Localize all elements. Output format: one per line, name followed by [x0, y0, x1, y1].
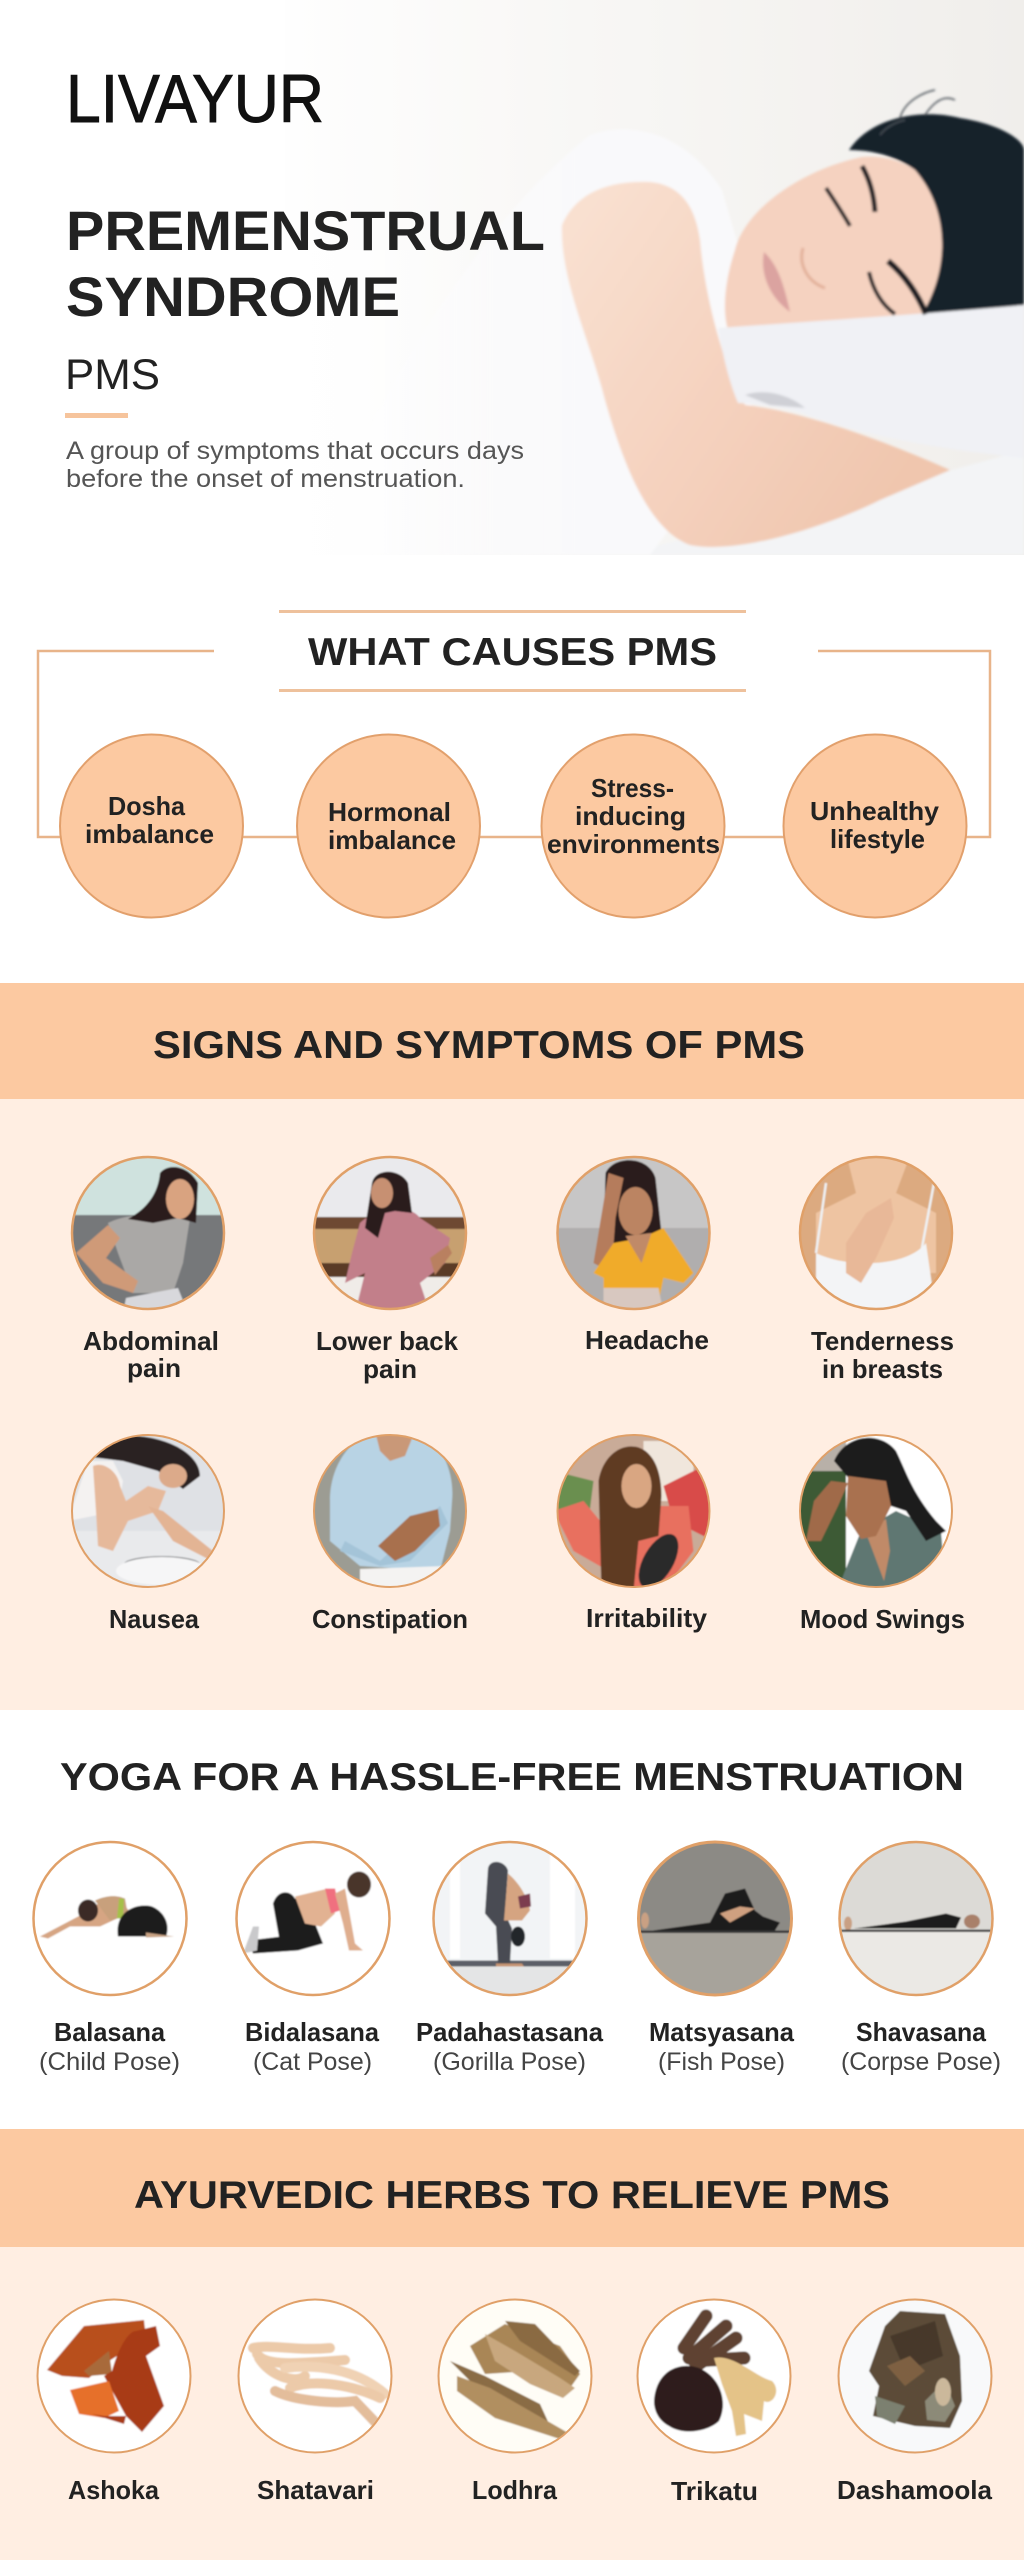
- hero photo: woman sleeping on a pillow: [516, 0, 1024, 555]
- yoga: padahastasana: Padahastasana: [416, 2017, 604, 2047]
- description: A group of symptoms that occurs days: [66, 437, 524, 465]
- yoga: bidalasana: Bidalasana: [245, 2017, 380, 2047]
- yoga: bidalasana: (Cat Pose): [253, 2048, 372, 2076]
- symptom: nausea: [68, 1431, 228, 1634]
- herb: shatavari: [235, 2296, 395, 2505]
- hero panel: [65, 0, 1024, 555]
- banner: AYURVEDIC HERBS TO RELIEVE PMS: [134, 2174, 890, 2217]
- herb: lodhra: Lodhra: [472, 2475, 558, 2505]
- symptom: mood swings: [796, 1431, 965, 1634]
- herb: trikatu: [634, 2296, 794, 2506]
- panel: ayurvedic herbs: [0, 2129, 1024, 2560]
- cause: dosha imbalance: Dosha: [108, 791, 186, 821]
- yoga: padahastasana: [416, 1838, 604, 2076]
- yoga: bidalasana: [233, 1838, 393, 2076]
- symptom: abdominal pain: [68, 1153, 228, 1383]
- cause: hormonal imbalance: imbalance: [328, 825, 456, 855]
- cause: dosha imbalance: [60, 734, 243, 918]
- logo: LIVAYUR: [66, 61, 324, 137]
- cause: unhealthy lifestyle: Unhealthy: [810, 796, 940, 826]
- cause: stress-inducing environments: [542, 734, 724, 918]
- symptom: constipation: Constipation: [312, 1604, 468, 1634]
- subtitle: PMS: [65, 351, 160, 399]
- yoga: matsyasana: (Fish Pose): [658, 2048, 785, 2076]
- panel: signs and symptoms: [0, 983, 1024, 1710]
- yoga: balasana: (Child Pose): [39, 2048, 180, 2076]
- herb: ashoka: Ashoka: [68, 2475, 160, 2505]
- banner: [0, 2129, 1024, 2247]
- symptom: lower back pain: Lower back: [316, 1326, 459, 1356]
- cause: stress-inducing environments: Stress-: [591, 773, 674, 803]
- symptom: irritability: Irritability: [586, 1603, 708, 1633]
- symptom: tenderness in breasts: Tenderness: [811, 1326, 954, 1356]
- symptom: irritability: [554, 1431, 714, 1633]
- herb: shatavari: Shatavari: [257, 2475, 374, 2505]
- symptom: constipation: [310, 1431, 470, 1634]
- heading: YOGA FOR A HASSLE-FREE MENSTRUATION: [60, 1756, 964, 1799]
- symptom: nausea: Nausea: [109, 1604, 200, 1634]
- description: before the onset of menstruation.: [66, 465, 465, 493]
- yoga: balasana: [30, 1838, 190, 2076]
- yoga: matsyasana: Matsyasana: [649, 2017, 795, 2047]
- herb: ashoka: [34, 2296, 194, 2505]
- herb: dashamoola: Dashamoola: [837, 2475, 993, 2505]
- cause: dosha imbalance: imbalance: [85, 819, 214, 849]
- cause: unhealthy lifestyle: lifestyle: [830, 824, 925, 854]
- symptom: abdominal pain: Abdominal: [83, 1326, 219, 1356]
- main title: SYNDROME: [66, 265, 400, 328]
- cause: unhealthy lifestyle: [784, 734, 966, 918]
- symptom: mood swings: Mood Swings: [800, 1604, 965, 1634]
- symptom: lower back pain: [310, 1153, 470, 1384]
- herb: lodhra: [435, 2296, 595, 2505]
- symptom: tenderness in breasts: [796, 1153, 956, 1384]
- banner: [0, 983, 1024, 1099]
- symptom: lower back pain: pain: [363, 1354, 417, 1384]
- symptom: tenderness in breasts: in breasts: [822, 1354, 943, 1384]
- cause: hormonal imbalance: Hormonal: [328, 797, 451, 827]
- cause: hormonal imbalance: [297, 734, 480, 918]
- cause: stress-inducing environments: environments: [547, 829, 720, 859]
- yoga: shavasana: Shavasana: [856, 2017, 987, 2047]
- symptom: headache: [554, 1153, 714, 1355]
- yoga: balasana: Balasana: [54, 2017, 166, 2047]
- main title: [66, 199, 545, 328]
- description: [66, 437, 524, 493]
- panel: yoga: [30, 1756, 1001, 2076]
- symptom: headache: Headache: [585, 1325, 709, 1355]
- accent bar: [65, 413, 128, 418]
- symptom: abdominal pain: pain: [127, 1353, 181, 1383]
- banner: SIGNS AND SYMPTOMS OF PMS: [153, 1024, 805, 1067]
- main title: PREMENSTRUAL: [66, 199, 545, 262]
- yoga: padahastasana: (Gorilla Pose): [433, 2048, 586, 2076]
- yoga: matsyasana: [635, 1838, 795, 2076]
- panel: what causes PMS: [38, 610, 990, 918]
- yoga: shavasana: [836, 1838, 1001, 2076]
- herb: trikatu: Trikatu: [671, 2476, 758, 2506]
- heading: WHAT CAUSES PMS: [308, 631, 717, 674]
- cause: stress-inducing environments: inducing: [575, 801, 686, 831]
- herb: dashamoola: [835, 2296, 995, 2505]
- yoga: shavasana: (Corpse Pose): [841, 2048, 1001, 2076]
